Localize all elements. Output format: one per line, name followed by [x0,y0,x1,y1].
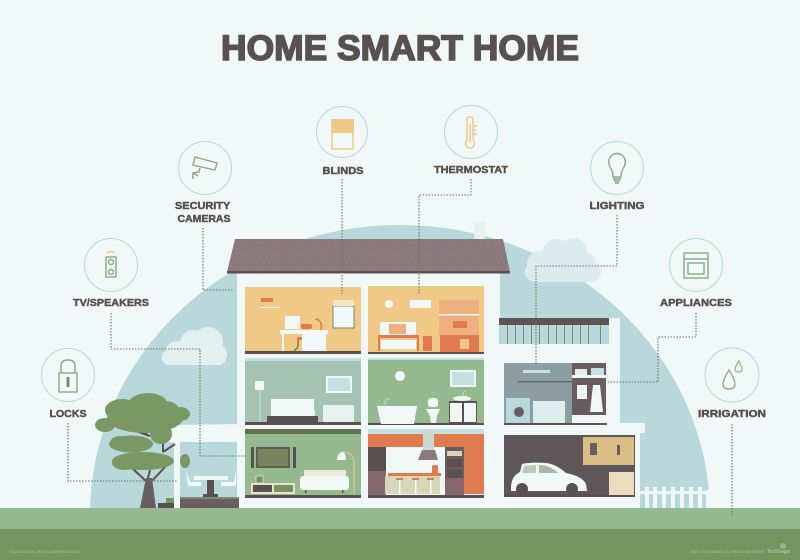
label: thermostat: THERMOSTAT [434,164,509,176]
label: security cameras: CAMERAS [178,213,230,225]
icon: locks [42,348,94,402]
cloud right [525,238,601,282]
room: closet [572,363,606,415]
room: laundry [504,363,607,425]
connector: appliances [572,313,696,382]
logo: TechTarget [767,543,790,555]
label: security cameras: SECURITY [175,200,230,212]
photo credit: ILLUSTRATION: PHOTOGRAPHEE.STOCK [10,549,80,554]
tree [95,393,190,508]
connector: blinds [341,179,343,294]
grass [0,508,800,560]
icon: tv speakers [84,238,138,292]
chimney [474,222,485,240]
icon: thermostat [444,106,498,158]
roof [227,239,510,274]
room: office [245,287,361,354]
icon: security cameras [178,142,232,194]
connector: security cameras [203,228,233,290]
room: bedroom [368,286,484,354]
label: irrigation: IRRIGATION [698,408,766,420]
room: bathroom [368,358,484,425]
cloud left [162,327,227,365]
icon: lighting [590,142,644,194]
logo: TechTarget: TechTarget [767,549,790,555]
room: living room upper [245,358,361,425]
icon: irrigation [705,348,759,402]
title: HOME SMART HOME [221,29,579,68]
label: lighting: LIGHTING [590,200,644,212]
connector: locks [68,423,178,481]
connector: tv speakers [111,313,247,456]
house body [237,270,645,510]
label: locks: LOCKS [50,408,86,420]
room: garage [504,435,635,497]
porch [158,424,245,508]
icon: appliances [670,238,722,292]
label: blinds: BLINDS [322,165,364,177]
icon: blinds [316,106,368,158]
car [511,463,587,495]
room: kitchen [368,429,484,498]
connector: lighting [536,215,617,365]
background dome [90,225,710,515]
label: tv speakers: TV/SPEAKERS [73,297,149,309]
label: appliances: APPLIANCES [660,297,732,309]
connector: thermostat [419,179,471,294]
room: living room lower [245,429,361,498]
balcony [499,318,609,344]
connector: irrigation [731,424,733,516]
copyright: ©2017 TECHTARGET. ALL RIGHTS RESERVED. [690,549,765,554]
fence [640,487,710,508]
